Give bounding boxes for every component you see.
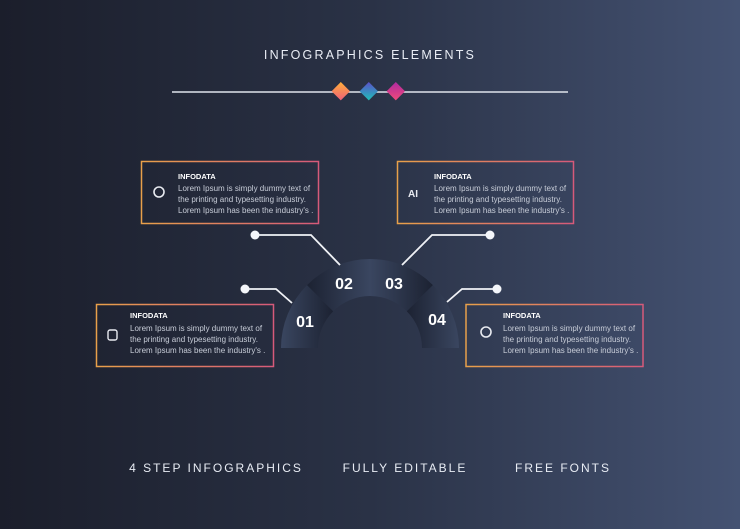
box 04 bbox=[466, 304, 643, 366]
connectors bbox=[245, 235, 497, 303]
box 03 bbox=[398, 162, 574, 224]
box 02: Lorem Ipsum is simply dummy text of bbox=[178, 184, 311, 193]
footer labels: FREE FONTS bbox=[515, 461, 611, 475]
box 03: Lorem Ipsum has been the industry's . bbox=[434, 206, 569, 215]
box 02 bbox=[142, 162, 318, 224]
semicircle chart: 03 bbox=[385, 276, 403, 293]
box 03: the printing and typesetting industry. bbox=[434, 195, 562, 204]
box 03: INFODATA bbox=[434, 172, 472, 181]
box 03: Lorem Ipsum is simply dummy text of bbox=[434, 184, 567, 193]
footer labels: 4 STEP INFOGRAPHICS bbox=[129, 461, 303, 475]
footer labels bbox=[129, 461, 611, 475]
box 04: Lorem Ipsum is simply dummy text of bbox=[503, 324, 636, 333]
footer labels: FULLY EDITABLE bbox=[343, 461, 467, 475]
box 04: INFODATA bbox=[503, 311, 541, 320]
box 02: INFODATA bbox=[178, 172, 216, 181]
box 01: INFODATA bbox=[130, 311, 168, 320]
box 04: Lorem Ipsum has been the industry's . bbox=[503, 346, 638, 355]
semicircle chart: 02 bbox=[335, 276, 353, 293]
semicircle chart: 01 bbox=[296, 314, 314, 331]
box 01 bbox=[96, 304, 274, 366]
box 01: Lorem Ipsum is simply dummy text of bbox=[130, 324, 263, 333]
box 02: the printing and typesetting industry. bbox=[178, 195, 306, 204]
box 03: AI bbox=[408, 189, 418, 200]
box 02: Lorem Ipsum has been the industry's . bbox=[178, 206, 313, 215]
box 04: the printing and typesetting industry. bbox=[503, 335, 631, 344]
semicircle chart bbox=[281, 259, 459, 348]
box 01: Lorem Ipsum has been the industry's . bbox=[130, 346, 265, 355]
semicircle chart: 04 bbox=[428, 312, 446, 329]
title divider with diamonds bbox=[172, 82, 568, 100]
box 01: the printing and typesetting industry. bbox=[130, 335, 258, 344]
title: INFOGRAPHICS ELEMENTS bbox=[264, 48, 476, 62]
